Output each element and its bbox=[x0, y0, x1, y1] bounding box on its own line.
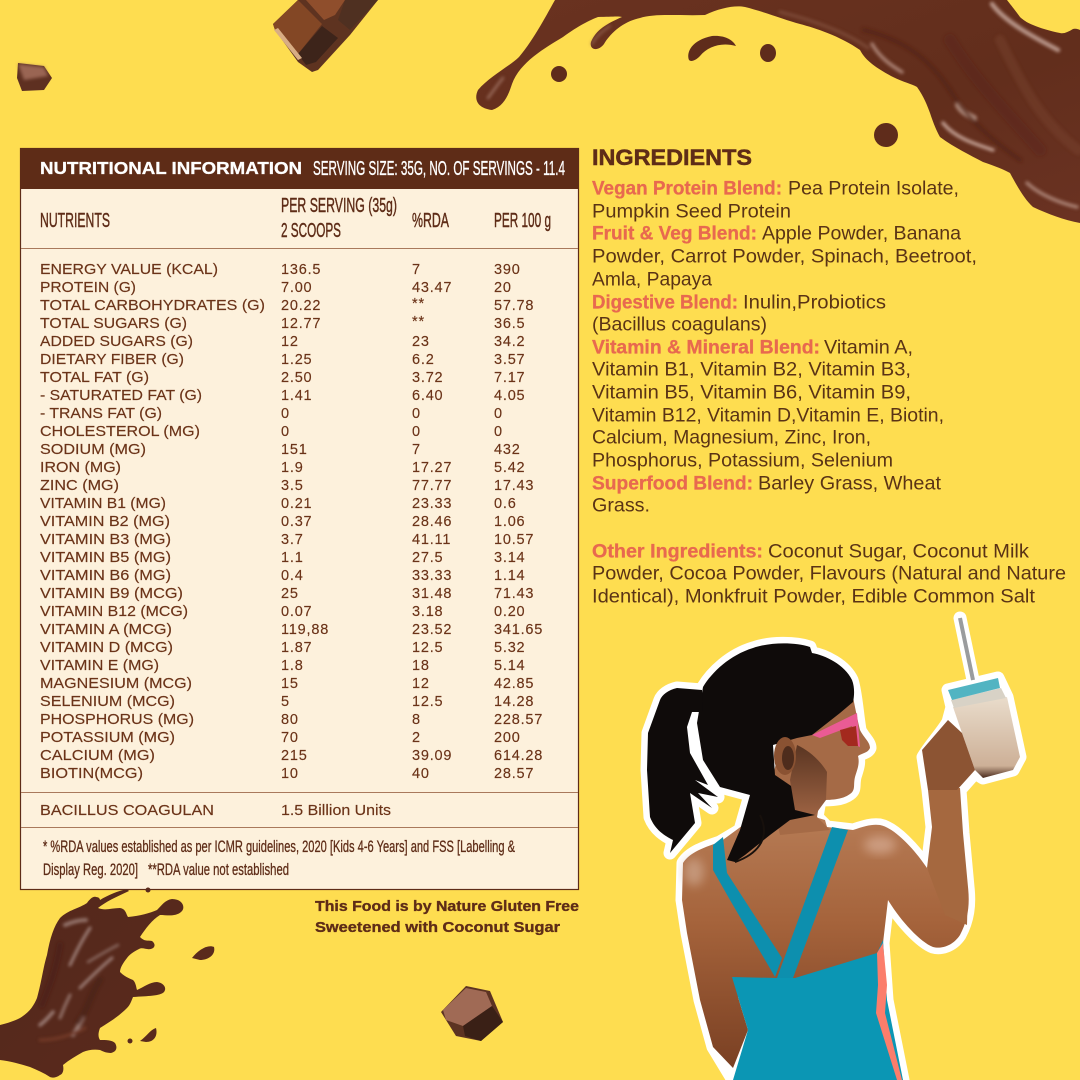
jar with straw bbox=[948, 618, 1020, 778]
nutrient rows: 151 bbox=[281, 442, 308, 458]
nutrient rows: PROTEIN (G) bbox=[40, 280, 136, 296]
nutrient rows: 36.5 bbox=[494, 316, 525, 332]
nutrient rows: 0.4 bbox=[281, 568, 304, 584]
nutrient rows: 0 bbox=[281, 424, 290, 440]
nutrient rows: 12.77 bbox=[281, 316, 321, 332]
body bbox=[682, 788, 969, 1068]
nutrient rows: TOTAL SUGARS (G) bbox=[40, 316, 187, 332]
nutrient rows: 1.1 bbox=[281, 550, 304, 566]
nutrient rows: 228.57 bbox=[494, 712, 543, 728]
nutrient rows: 12 bbox=[281, 334, 299, 350]
footnote: * %RDA values established as per ICMR guidelines, 2020 [Kids 4-6 Years] and FSS [Labelling & bbox=[43, 837, 515, 856]
nutrient rows: 6.2 bbox=[412, 352, 435, 368]
ingredients heading: INGREDIENTS bbox=[592, 145, 752, 170]
nutrient rows: 34.2 bbox=[494, 334, 525, 350]
nutrient rows: 23.52 bbox=[412, 622, 452, 638]
nutrient rows: 2 bbox=[412, 730, 421, 746]
ingredients list: Pumpkin Seed Protein bbox=[592, 200, 791, 222]
nutrient rows: 15 bbox=[281, 676, 299, 692]
nutrient rows: VITAMIN B2 (MG) bbox=[40, 514, 170, 530]
nutrient rows: 3.18 bbox=[412, 604, 443, 620]
table column headers bbox=[40, 194, 551, 242]
nutrient rows: 10.57 bbox=[494, 532, 534, 548]
ingredients list: Grass. bbox=[592, 494, 650, 516]
nutrient rows: 1.87 bbox=[281, 640, 312, 656]
nutrient rows: BIOTIN(MCG) bbox=[40, 766, 143, 782]
nutrient rows: DIETARY FIBER (G) bbox=[40, 352, 184, 368]
nutrient rows: 27.5 bbox=[412, 550, 443, 566]
nutrient rows: 10 bbox=[281, 766, 299, 782]
table column headers: PER 100 g bbox=[494, 209, 551, 232]
nutrient rows: 6.40 bbox=[412, 388, 443, 404]
chocolate piece: small top left bbox=[17, 63, 52, 91]
nutrient rows: 0 bbox=[412, 406, 421, 422]
ingredients list: Powder, Carrot Powder, Spinach, Beetroot, bbox=[592, 246, 977, 268]
nutrient rows: CHOLESTEROL (MG) bbox=[40, 424, 200, 440]
table panel bbox=[20, 148, 579, 890]
nutrient rows: ZINC (MG) bbox=[40, 478, 119, 494]
ingredients list: Phosphorus, Potassium, Selenium bbox=[592, 450, 893, 472]
nutrient rows: 5.42 bbox=[494, 460, 525, 476]
nutrient rows: CALCIUM (MG) bbox=[40, 748, 155, 764]
nutrient rows: 3.7 bbox=[281, 532, 304, 548]
nutrient rows: VITAMIN E (MG) bbox=[40, 658, 159, 674]
nutrient rows: 42.85 bbox=[494, 676, 534, 692]
ingredients list: Amla, Papaya bbox=[592, 268, 712, 290]
note: gluten free: This Food is by Nature Gluten Free bbox=[315, 899, 579, 915]
nutrient rows: 5.32 bbox=[494, 640, 525, 656]
chocolate piece: bottom cube bbox=[441, 986, 503, 1041]
chocolate piece: top bar bbox=[273, 0, 378, 72]
footnote: Display Reg. 2020] bbox=[43, 860, 138, 879]
nutrient rows: POTASSIUM (MG) bbox=[40, 730, 175, 746]
nutrient rows: 3.14 bbox=[494, 550, 525, 566]
nutrient rows: 341.65 bbox=[494, 622, 543, 638]
ingredients list: Vitamin A, bbox=[824, 336, 913, 358]
nutrient rows: 33.33 bbox=[412, 568, 452, 584]
nutrient rows: PHOSPHORUS (MG) bbox=[40, 712, 194, 728]
chocolate drops: bottom left bbox=[128, 888, 214, 1044]
bacillus row: 1.5 Billion Units bbox=[281, 803, 391, 819]
nutrient rows: MAGNESIUM (MCG) bbox=[40, 676, 192, 692]
nutrient rows: 41.11 bbox=[412, 532, 451, 548]
note: gluten free bbox=[315, 899, 579, 936]
table title bar: SERVING SIZE: 35G, NO. OF SERVINGS - 11.4 bbox=[313, 158, 565, 180]
nutrient rows: 17.43 bbox=[494, 478, 534, 494]
ingredients list: Apple Powder, Banana bbox=[762, 222, 961, 244]
nutrient rows: 432 bbox=[494, 442, 521, 458]
nutrient rows: 1.9 bbox=[281, 460, 304, 476]
nutrient rows: 8 bbox=[412, 712, 421, 728]
sunglasses bbox=[812, 713, 860, 747]
table background bbox=[20, 148, 578, 890]
nutrient rows: 0.07 bbox=[281, 604, 312, 620]
nutrient rows: 28.46 bbox=[412, 514, 452, 530]
nutrient rows: 215 bbox=[281, 748, 308, 764]
nutrient rows: 0.21 bbox=[281, 496, 312, 512]
nutrient rows: 7.00 bbox=[281, 280, 312, 296]
bacillus row: BACILLUS COAGULAN bbox=[40, 803, 214, 819]
table title bar bbox=[20, 148, 579, 189]
nutrient rows: - SATURATED FAT (G) bbox=[40, 388, 202, 404]
nutrient rows: 136.5 bbox=[281, 262, 321, 278]
nutrient rows: 28.57 bbox=[494, 766, 534, 782]
nutrient rows: ADDED SUGARS (G) bbox=[40, 334, 193, 350]
girl holding jar bbox=[647, 618, 1020, 1080]
nutrient rows: TOTAL FAT (G) bbox=[40, 370, 149, 386]
nutrient rows: 390 bbox=[494, 262, 521, 278]
footnote bbox=[43, 837, 515, 879]
nutrient rows: 3.5 bbox=[281, 478, 304, 494]
chocolate drops: top bbox=[551, 36, 898, 147]
hand bbox=[922, 720, 975, 790]
nutrient rows: 1.14 bbox=[494, 568, 525, 584]
nutrient rows: 17.27 bbox=[412, 460, 452, 476]
ingredients list: Barley Grass, Wheat bbox=[758, 472, 942, 494]
ingredients list: Vitamin & Mineral Blend: bbox=[592, 336, 820, 358]
chocolate splash: top right bbox=[476, 0, 1080, 223]
nutrient rows: 614.28 bbox=[494, 748, 543, 764]
nutrient rows: 39.09 bbox=[412, 748, 452, 764]
nutrient rows: VITAMIN B5 (MG) bbox=[40, 550, 171, 566]
nutrient rows: VITAMIN B6 (MG) bbox=[40, 568, 171, 584]
nutrient rows: 12 bbox=[412, 676, 430, 692]
nutrient rows: 2.50 bbox=[281, 370, 312, 386]
nutrient rows: 3.57 bbox=[494, 352, 525, 368]
ingredients list: Identical), Monkfruit Powder, Edible Common Salt bbox=[592, 586, 1036, 608]
ingredients list: Vitamin B12, Vitamin D,Vitamin E, Biotin, bbox=[592, 404, 944, 426]
table column headers: NUTRIENTS bbox=[40, 209, 110, 232]
ingredients list bbox=[592, 178, 1066, 608]
nutrient rows: 7 bbox=[412, 442, 421, 458]
nutrient rows: VITAMIN D (MCG) bbox=[40, 640, 173, 656]
table title bar: NUTRITIONAL INFORMATION bbox=[40, 158, 302, 178]
head and face bbox=[697, 643, 870, 862]
nutrient rows: 57.78 bbox=[494, 298, 534, 314]
nutrient rows: 7 bbox=[412, 262, 421, 278]
nutrient rows: VITAMIN B12 (MCG) bbox=[40, 604, 188, 620]
nutrient rows: 80 bbox=[281, 712, 299, 728]
ingredients list: Vitamin B5, Vitamin B6, Vitamin B9, bbox=[592, 382, 911, 404]
swimsuit bbox=[713, 827, 903, 1080]
nutrient rows: 71.43 bbox=[494, 586, 534, 602]
nutrient rows: 77.77 bbox=[412, 478, 452, 494]
ponytail bbox=[647, 688, 718, 853]
note: gluten free: Sweetened with Coconut Sugar bbox=[315, 920, 560, 936]
nutrient rows: 0 bbox=[412, 424, 421, 440]
nutrient rows: 18 bbox=[412, 658, 430, 674]
nutrient rows: 23.33 bbox=[412, 496, 452, 512]
table column headers: PER SERVING (35g) bbox=[281, 194, 397, 217]
ingredients list: Coconut Sugar, Coconut Milk bbox=[768, 540, 1029, 562]
nutrient rows: SELENIUM (MCG) bbox=[40, 694, 175, 710]
ingredients list: Pea Protein Isolate, bbox=[788, 178, 959, 200]
ingredients list: Inulin,Probiotics bbox=[743, 292, 886, 314]
nutrient rows: 0.6 bbox=[494, 496, 517, 512]
nutrient rows: VITAMIN A (MCG) bbox=[40, 622, 172, 638]
ingredients list: Calcium, Magnesium, Zinc, Iron, bbox=[592, 426, 871, 448]
nutrient rows: VITAMIN B3 (MG) bbox=[40, 532, 171, 548]
nutrient rows: 40 bbox=[412, 766, 430, 782]
ingredients list: Superfood Blend: bbox=[592, 472, 753, 494]
nutrient rows: 23 bbox=[412, 334, 430, 350]
ingredients list: (Bacillus coagulans) bbox=[592, 314, 767, 336]
ingredients list: Vitamin B1, Vitamin B2, Vitamin B3, bbox=[592, 358, 911, 380]
bacillus row bbox=[40, 803, 391, 819]
nutrient rows: 0 bbox=[494, 424, 503, 440]
nutrient rows: TOTAL CARBOHYDRATES (G) bbox=[40, 298, 265, 314]
nutrient rows: 0 bbox=[494, 406, 503, 422]
ingredients list: Vegan Protein Blend: bbox=[592, 178, 782, 200]
nutrient rows: VITAMIN B1 (MG) bbox=[40, 496, 166, 512]
nutrient rows: ** bbox=[412, 296, 425, 312]
nutrient rows: 20.22 bbox=[281, 298, 321, 314]
chocolate splash: bottom left bbox=[0, 889, 183, 1078]
nutrient rows: 1.8 bbox=[281, 658, 304, 674]
nutrient rows: 43.47 bbox=[412, 280, 452, 296]
footnote: **RDA value not established bbox=[148, 860, 289, 879]
nutrient rows: 7.17 bbox=[494, 370, 525, 386]
nutrient rows: 200 bbox=[494, 730, 521, 746]
nutrient rows: ** bbox=[412, 314, 425, 330]
nutrient rows: 1.41 bbox=[281, 388, 312, 404]
nutrient rows: ENERGY VALUE (KCAL) bbox=[40, 262, 218, 278]
table column headers: 2 SCOOPS bbox=[281, 219, 341, 242]
ingredients list: Other Ingredients: bbox=[592, 540, 763, 562]
nutrient rows: 12.5 bbox=[412, 640, 443, 656]
nutrient rows: 14.28 bbox=[494, 694, 534, 710]
ingredients list: Powder, Cocoa Powder, Flavours (Natural and Nature bbox=[592, 562, 1066, 584]
nutrient rows: 12.5 bbox=[412, 694, 443, 710]
nutrient rows: SODIUM (MG) bbox=[40, 442, 146, 458]
nutrient rows: 0.20 bbox=[494, 604, 525, 620]
nutrient rows: 0 bbox=[281, 406, 290, 422]
nutrient rows: 5.14 bbox=[494, 658, 525, 674]
nutrient rows: 5 bbox=[281, 694, 290, 710]
white sticker outline bbox=[647, 618, 1020, 1080]
nutrient rows: 3.72 bbox=[412, 370, 443, 386]
nutrient rows: 1.25 bbox=[281, 352, 312, 368]
nutrient rows: 20 bbox=[494, 280, 512, 296]
ingredients list: Fruit & Veg Blend: bbox=[592, 222, 757, 244]
nutrient rows: - TRANS FAT (G) bbox=[40, 406, 162, 422]
nutrient rows: IRON (MG) bbox=[40, 460, 121, 476]
nutrient rows bbox=[40, 262, 543, 782]
nutrient rows: 119,88 bbox=[281, 622, 329, 638]
nutrient rows: VITAMIN B9 (MCG) bbox=[40, 586, 183, 602]
nutrient rows: 25 bbox=[281, 586, 299, 602]
nutrient rows: 0.37 bbox=[281, 514, 312, 530]
nutrient rows: 1.06 bbox=[494, 514, 525, 530]
table column headers: %RDA bbox=[412, 209, 449, 232]
nutrient rows: 4.05 bbox=[494, 388, 525, 404]
nutrient rows: 70 bbox=[281, 730, 299, 746]
ingredients list: Digestive Blend: bbox=[592, 292, 738, 314]
nutrient rows: 31.48 bbox=[412, 586, 452, 602]
